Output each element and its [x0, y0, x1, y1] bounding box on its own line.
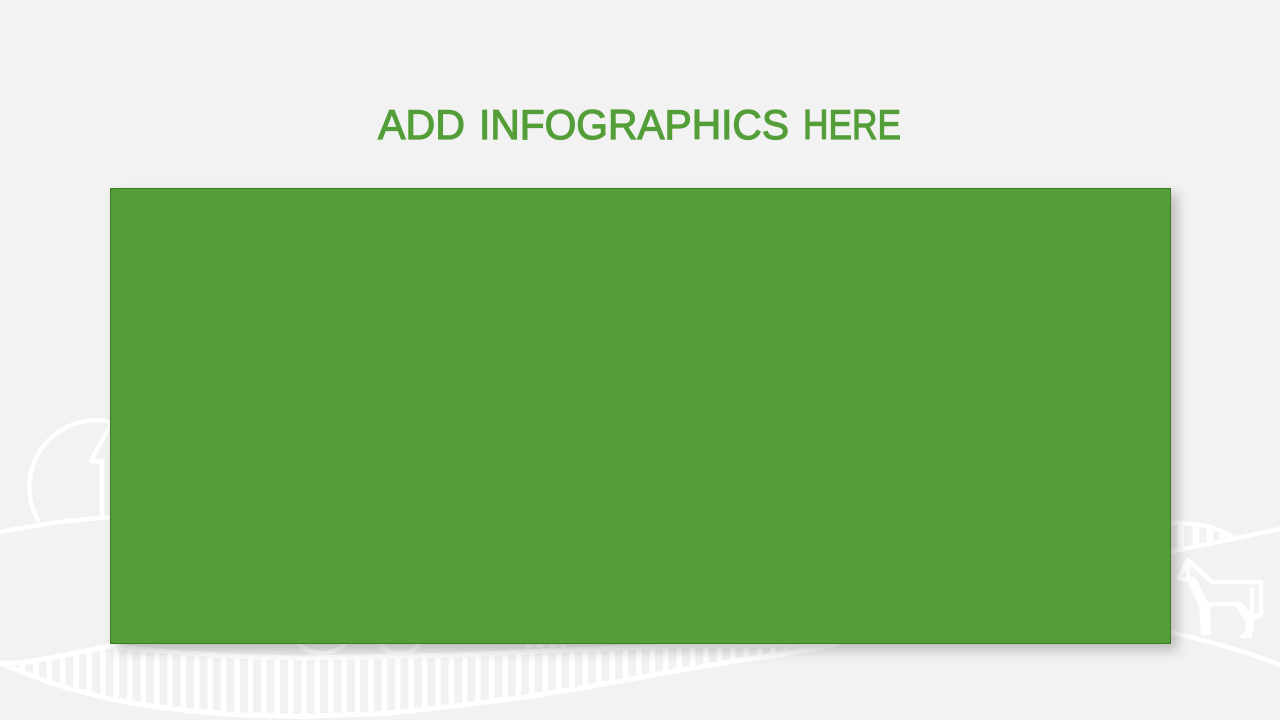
title	[377, 101, 901, 148]
right ground curve	[1165, 631, 1280, 665]
wagon wheels below the panel	[288, 585, 565, 654]
left hill line	[0, 517, 112, 532]
right hill with stripes	[1165, 523, 1280, 553]
title: ADD	[378, 101, 465, 148]
left hill with sun and barn	[0, 420, 112, 532]
icon: horse	[1179, 560, 1261, 637]
panel: green infographic placeholder	[110, 188, 1171, 644]
title: INFOGRAPHICS	[479, 101, 789, 148]
icon: barn outline	[91, 422, 112, 516]
title: HERE	[803, 101, 901, 148]
background farm line art	[0, 418, 1280, 719]
striped field band at the bottom	[0, 640, 840, 720]
icon: sun circle	[29, 420, 112, 520]
